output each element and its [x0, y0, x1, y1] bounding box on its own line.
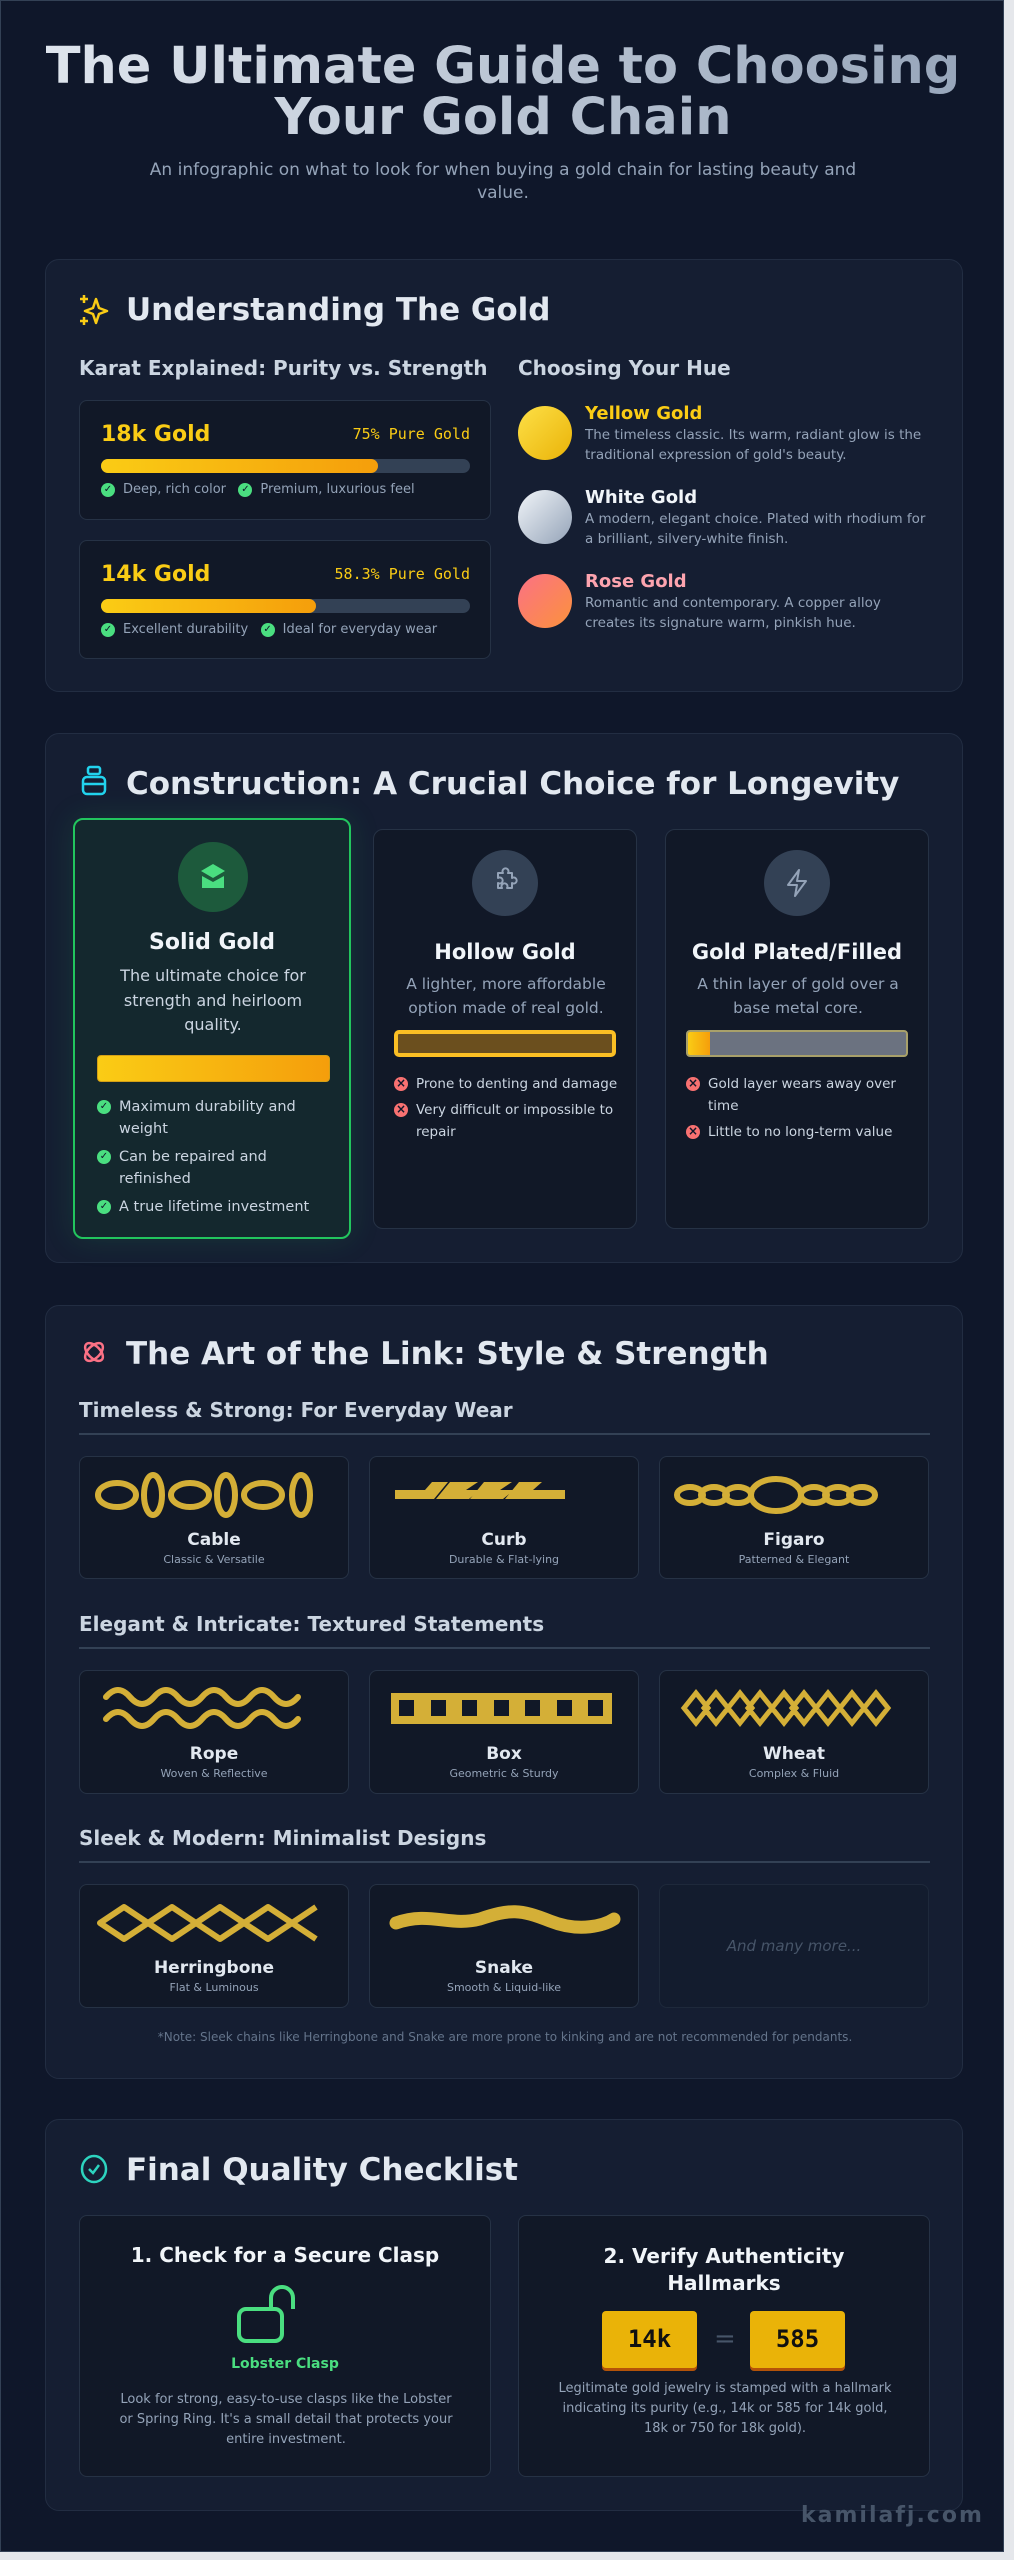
card: solid gold: Can be repaired and refinished — [119, 1149, 267, 1187]
panel: final checklist — [45, 2119, 963, 2511]
subtitle: An infographic on what to look for when buying a gold chain for lasting beauty and value. — [150, 160, 856, 203]
chain: rope — [79, 1670, 349, 1794]
chain: rope: Woven & Reflective — [160, 1767, 268, 1780]
chain: curb: Curb — [481, 1530, 527, 1550]
checklist: clasp: Look for strong, easy-to-use clasps like the Lobster or Spring Ring. It's a small detail that protects your entire investment. — [119, 2392, 453, 2447]
heading: Construction: A Crucial Choice for Longevity — [126, 766, 899, 802]
chain: wheat: Complex & Fluid — [749, 1767, 839, 1780]
icon: puzzle — [497, 867, 518, 889]
karat card 18k: Deep, rich color — [123, 482, 226, 497]
subheading: hue: Choosing Your Hue — [518, 356, 731, 380]
checklist: clasp: Lobster Clasp — [231, 2356, 339, 2372]
heading: Understanding The Gold — [126, 292, 550, 328]
card: gold plated: A thin layer of gold over a base metal core. — [697, 975, 899, 1017]
subheading: sleek: Sleek & Modern: Minimalist Designs — [79, 1826, 486, 1850]
card: hollow gold — [373, 829, 637, 1229]
chain: figaro — [659, 1456, 929, 1579]
checklist: hallmarks: 2. Verify Authenticity — [604, 2244, 844, 2268]
hue: rose — [518, 571, 881, 631]
hue: yellow: Yellow Gold — [585, 403, 702, 424]
hue: white: White Gold — [585, 487, 697, 508]
hue: white: A modern, elegant choice. Plated with rhodium for a brilliant, silvery-white finish. — [585, 511, 925, 547]
panel: understanding the gold — [45, 259, 963, 692]
card: solid gold — [73, 818, 351, 1239]
card: gold plated — [665, 829, 929, 1229]
chain: box: Geometric & Sturdy — [449, 1767, 559, 1780]
placeholder: and many more: And many more... — [727, 1937, 861, 1955]
chain: curb — [369, 1456, 639, 1579]
karat card 18k: Premium, luxurious feel — [260, 482, 415, 497]
badge 14k — [602, 2311, 697, 2368]
card: solid gold: Maximum durability and weight — [119, 1099, 296, 1137]
checklist: hallmarks: Hallmarks — [667, 2271, 781, 2295]
chain: wheat — [659, 1670, 929, 1794]
icon: cyan container — [82, 766, 106, 796]
karat card 14k: Excellent durability — [123, 622, 248, 637]
karat card 14k: 14k Gold — [101, 562, 210, 587]
icon: lightning — [787, 869, 807, 897]
chain: cable: Classic & Versatile — [163, 1553, 265, 1566]
subheading: karat: Karat Explained: Purity vs. Strength — [79, 356, 487, 380]
panel: art of the link — [45, 1305, 963, 2079]
card: hollow gold: Very difficult or impossible to repair — [416, 1102, 613, 1140]
chain: cable — [79, 1456, 349, 1579]
card: hollow gold: A lighter, more affordable option made of real gold. — [406, 975, 606, 1017]
karat card 18k: 18k Gold — [101, 422, 210, 447]
card: hollow gold: Prone to denting and damage — [416, 1076, 617, 1092]
card: gold plated: Gold Plated/Filled — [692, 940, 902, 964]
icon: sparkles — [80, 295, 108, 325]
chain: herringbone: Herringbone — [154, 1958, 274, 1978]
watermark: kamilafj.com — [801, 2503, 984, 2528]
chain: figaro: Figaro — [763, 1530, 825, 1550]
hue: yellow: The timeless classic. Its warm, radiant glow is the traditional expression of gold's beauty. — [585, 427, 921, 463]
checklist: hallmarks: = — [714, 2324, 736, 2354]
hue: rose: Romantic and contemporary. A copper alloy creates its signature warm, pinkish hue. — [585, 595, 881, 631]
chain: curb: Durable & Flat-lying — [449, 1553, 559, 1566]
hue: yellow — [518, 403, 921, 463]
chain: box — [369, 1670, 639, 1794]
heading: The Art of the Link: Style & Strength — [126, 1336, 769, 1372]
checklist: clasp — [79, 2215, 491, 2477]
chain: wheat: Wheat — [763, 1744, 825, 1764]
chain: figaro: Patterned & Elegant — [739, 1553, 849, 1566]
badge 585 — [750, 2311, 845, 2368]
panel: construction — [45, 733, 963, 1263]
subheading: elegant: Elegant & Intricate: Textured Statements — [79, 1612, 544, 1636]
checklist: hallmarks: Legitimate gold jewelry is stamped with a hallmark indicating its purity (e.g., 14k or 585 for 14k gold, 18k or 750 for 18k gold). — [558, 2381, 892, 2436]
title: Your Gold Chain — [274, 88, 732, 147]
hue: white — [518, 487, 926, 547]
badge 14k: 14k — [628, 2325, 671, 2353]
card: hollow gold: Hollow Gold — [434, 940, 576, 964]
chain: rope: Rope — [190, 1744, 238, 1764]
note: *Note: Sleek chains like Herringbone and Snake are more prone to kinking and are not recommended for pendants. — [158, 2030, 852, 2044]
chain: snake — [369, 1884, 639, 2008]
karat card 18k — [79, 400, 491, 520]
icon: pink link — [84, 1342, 104, 1362]
placeholder: and many more — [659, 1884, 929, 2008]
karat card 14k: Ideal for everyday wear — [283, 622, 437, 637]
icon: check circle — [80, 2154, 108, 2184]
karat card 14k: 58.3% Pure Gold — [335, 565, 470, 583]
card: gold plated: Little to no long-term value — [708, 1124, 892, 1140]
card: solid gold: Solid Gold — [149, 930, 275, 955]
icon: box — [201, 864, 225, 888]
chain: snake: Snake — [475, 1958, 533, 1978]
chain: snake: Smooth & Liquid-like — [447, 1981, 561, 1994]
card: solid gold: A true lifetime investment — [119, 1199, 309, 1215]
heading: Final Quality Checklist — [126, 2152, 518, 2188]
karat card 14k — [79, 540, 491, 659]
chain: cable: Cable — [187, 1530, 241, 1550]
karat card 18k: 75% Pure Gold — [353, 425, 470, 443]
chain: box: Box — [486, 1744, 522, 1764]
title — [1, 41, 1005, 143]
chain: herringbone: Flat & Luminous — [169, 1981, 259, 1994]
chain: herringbone — [79, 1884, 349, 2008]
icon: lock — [237, 2285, 295, 2343]
card: gold plated: Gold layer wears away over time — [708, 1076, 896, 1114]
card: solid gold: The ultimate choice for strength and heirloom quality. — [120, 966, 306, 1034]
subheading: timeless: Timeless & Strong: For Everyday Wear — [79, 1398, 513, 1422]
badge 585: 585 — [776, 2325, 819, 2353]
checklist: clasp: 1. Check for a Secure Clasp — [131, 2243, 439, 2267]
title: The Ultimate Guide to Choosing — [46, 37, 960, 96]
checklist: hallmarks — [518, 2215, 930, 2477]
hue: rose: Rose Gold — [585, 571, 687, 592]
